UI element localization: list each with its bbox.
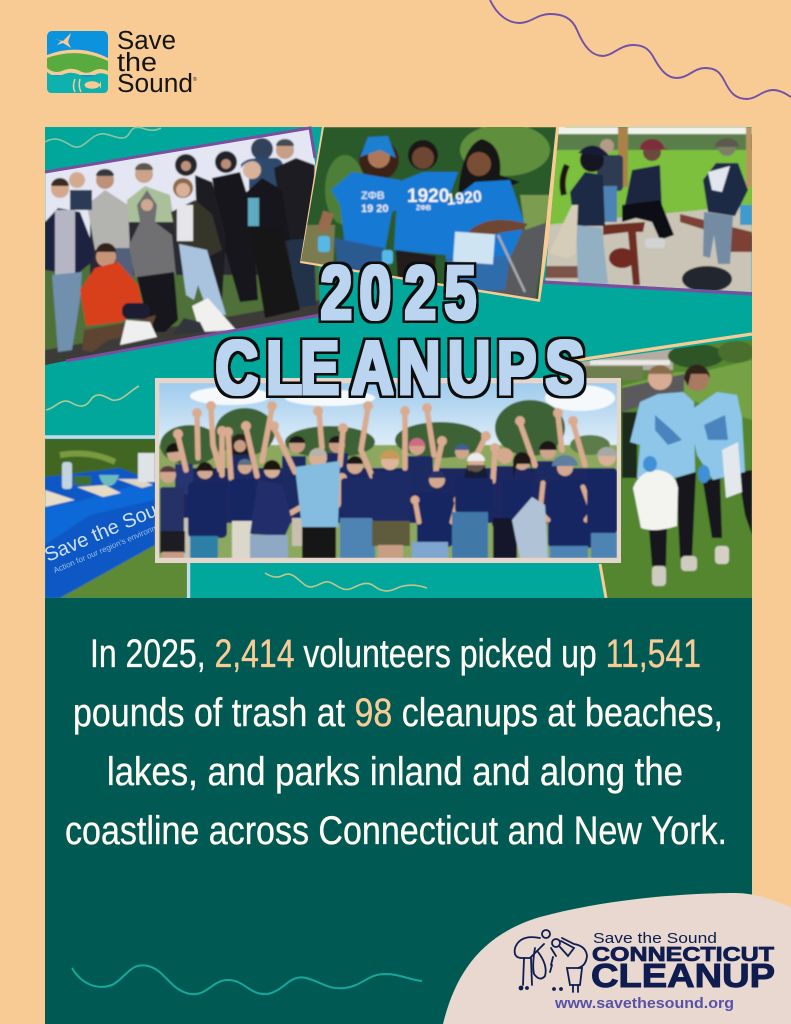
logo wordmark: Sound (117, 70, 193, 98)
logo text: Save the Sound: Save the Sound (593, 930, 717, 947)
person: woman with 1920 shirt: ZΦB (416, 205, 431, 212)
person: woman in quilted jacket (171, 178, 226, 315)
person: woman left with bucket (630, 365, 697, 586)
logo wordmark: ® (193, 76, 197, 83)
photo: volunteers group in jackets (45, 127, 325, 370)
peach line next to teal strip (600, 564, 606, 598)
statement text block (65, 632, 727, 853)
person 4 (250, 460, 292, 558)
logo icon (47, 31, 108, 93)
photo: Save the Sound table (45, 439, 187, 598)
person 7 (372, 450, 410, 558)
squiggle: teal strip (265, 573, 427, 591)
purple band below picnic photo (543, 282, 752, 294)
squiggle: collage top left (45, 127, 161, 147)
person 2 (188, 462, 227, 558)
label on blue tablecloth: Action for our region's environment (52, 518, 170, 575)
person: woman with 1920 shirt: 1920 (407, 186, 449, 207)
person: back man (69, 172, 92, 210)
person 6 (340, 456, 375, 558)
corner blob (443, 893, 791, 1024)
photo: volunteers at picnic shelter (545, 127, 755, 295)
person: woman with long hair and clipboard: 1920 (446, 188, 483, 209)
person 1 (160, 466, 185, 558)
person: hooded dark 2 (175, 154, 226, 310)
group photo frame (155, 378, 621, 563)
person 5 light blue shirt (295, 448, 340, 558)
picnic table right (680, 205, 752, 252)
squiggle: bottom teal (72, 965, 422, 994)
person: woman right with trash bag (684, 364, 752, 564)
shelter posts (618, 127, 628, 187)
line 1: In 2025, 2,414 volunteers picked up 11,541 (90, 632, 701, 676)
person: man in light green (127, 163, 174, 222)
person: woman with long hair and clipboard (446, 139, 525, 292)
title line 1: 2025 (320, 251, 476, 336)
raised hands (173, 401, 578, 506)
logo text: Cleanup: CLEANUP (591, 957, 775, 994)
person: woman with wide hat and papers (703, 138, 748, 264)
person 12 (587, 447, 617, 558)
person 8 (410, 471, 462, 558)
raised arms (178, 408, 585, 518)
dark green text panel (45, 598, 752, 1024)
bag: white trash bag right (192, 298, 236, 332)
website url: www.savethesound.org (554, 996, 734, 1012)
teal strip under group photo (190, 564, 602, 598)
white bucket (633, 470, 678, 530)
logo wordmark (117, 27, 197, 98)
person: woman with 1920 shirt (394, 140, 458, 285)
purple band top of first photo (45, 128, 315, 172)
person: man crouching in red jacket (80, 243, 156, 352)
person: woman in black jacket (240, 159, 300, 318)
red bag on ground (609, 248, 635, 268)
person: back hood navy (249, 138, 283, 198)
person: seated woman red cap (622, 139, 674, 248)
line 2: pounds of trash at 98 cleanups at beaches, (73, 691, 723, 735)
peach band above lower right photo (571, 334, 752, 361)
title line 2: CLEANUPS (215, 326, 585, 411)
picnic table left (545, 222, 645, 285)
line 3: lakes, and parks inland and along the (107, 750, 683, 794)
lavender line around lower left photo (45, 437, 188, 598)
person: hooded dark (212, 151, 258, 302)
photo: two women with bucket (573, 340, 754, 600)
blue gloves (643, 456, 657, 472)
person: woman in grey hoodie (129, 190, 178, 332)
bag: white trash bag front (120, 320, 157, 345)
photo: three women in blue shirts (301, 127, 556, 299)
person 3 (230, 459, 255, 558)
backpack dark on ground (682, 266, 732, 292)
title: 2025 cleanups (215, 251, 585, 411)
photo frame: three women (300, 127, 565, 302)
label on blue tablecloth: Save the Sound (41, 491, 181, 567)
trees behind crowd (160, 400, 610, 465)
collage panel background (45, 127, 752, 598)
back row people (166, 434, 559, 558)
person: background seated woman (597, 139, 623, 222)
squiggle: collage mid left (46, 386, 139, 410)
logo wordmark: the (117, 49, 157, 77)
logo: Save the Sound (47, 27, 197, 98)
person: man in black jacket (274, 139, 316, 308)
crowd shadow mass (180, 468, 605, 523)
person: young man in navy (45, 178, 94, 352)
person: woman with bucket hat (317, 136, 402, 280)
Connecticut Cleanup logo (515, 930, 775, 1012)
purple band bottom of first photo (66, 315, 320, 361)
person: woman with bucket hat: 19 20 (361, 203, 389, 215)
logo text: Connecticut: CONNECTICUT (592, 944, 774, 966)
person: man in grey jacket (88, 168, 134, 280)
person 11 (540, 455, 594, 558)
person 9 (452, 453, 493, 558)
icon: volunteers picking up litter (515, 930, 587, 992)
person: woman in navy cap with tote (549, 146, 609, 284)
logo wordmark: Save (117, 27, 176, 55)
person 10 (493, 452, 533, 558)
photo: large volunteer group with raised hands (159, 383, 617, 558)
person: woman with bucket hat: ZΦB (361, 190, 385, 202)
jacket held by volunteer (512, 497, 548, 558)
decorative squiggle: top right purple (490, 0, 791, 99)
